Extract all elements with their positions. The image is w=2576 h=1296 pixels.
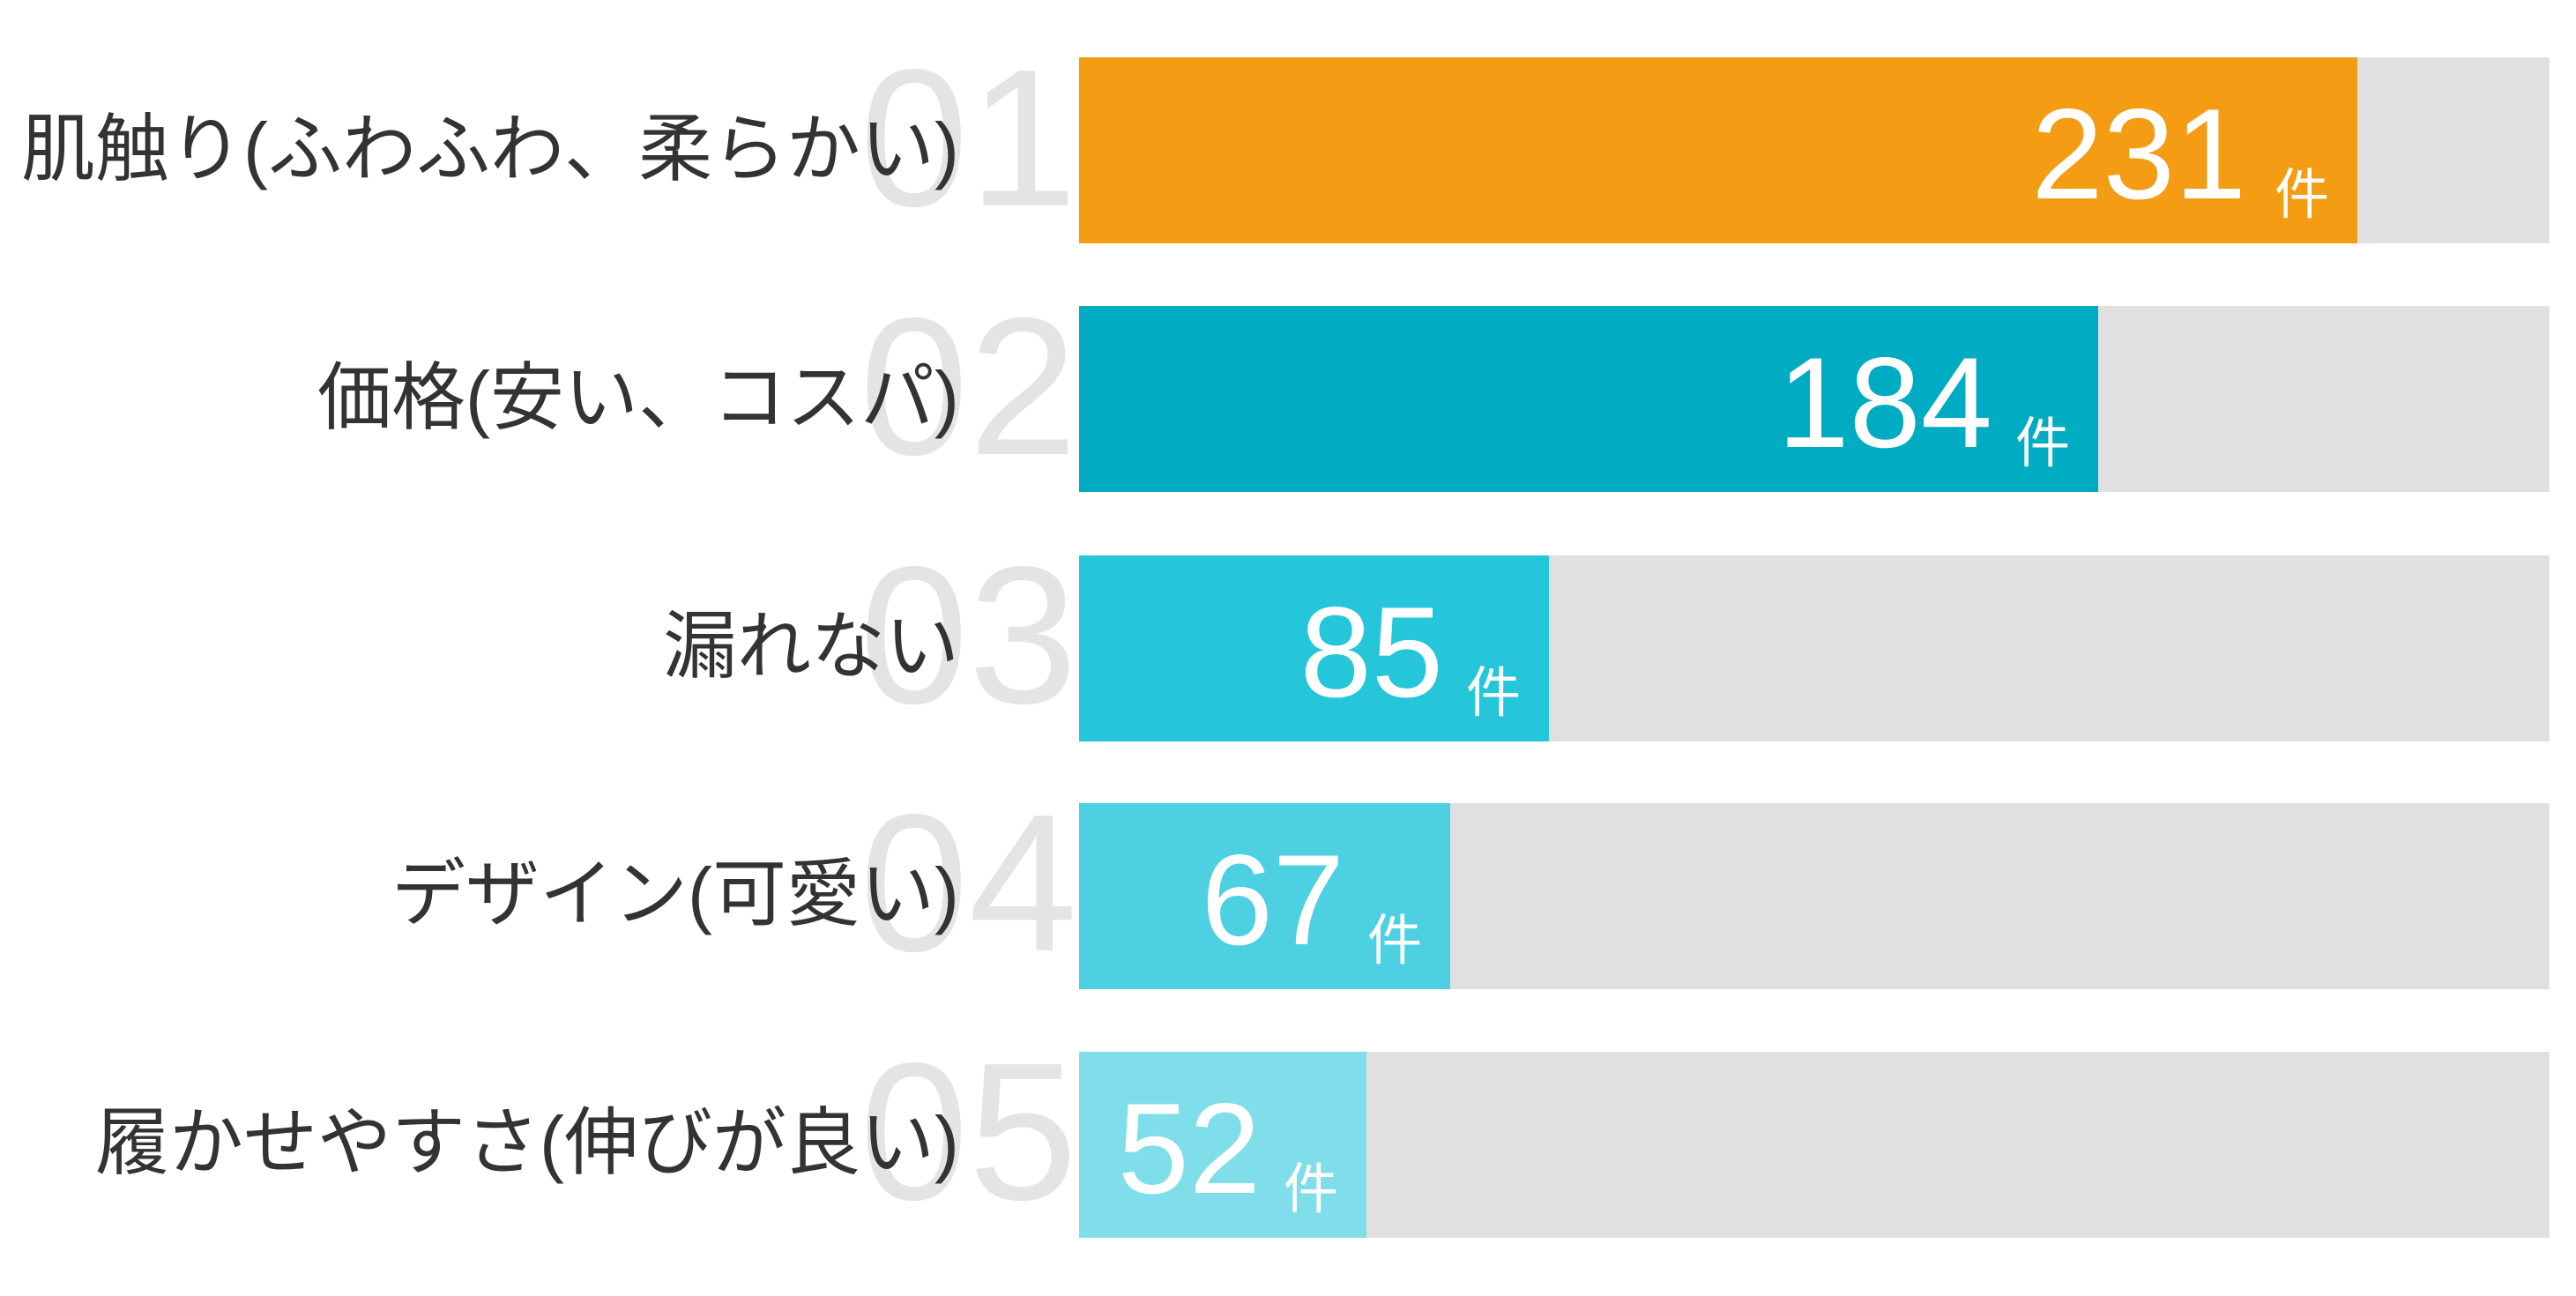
row 5: 履かせやすさ(伸びが良い): [95, 1101, 959, 1184]
row 5: [95, 1023, 2550, 1241]
row 3: 漏れない: [663, 605, 959, 688]
row 4: 67: [1202, 828, 1344, 972]
row 2: 02: [860, 278, 1077, 496]
row 1: 肌触り(ふわふわ、柔らかい): [21, 108, 959, 190]
row 4: デザイン(可愛い): [391, 853, 959, 935]
row 4: 04: [860, 774, 1077, 993]
row 2: 件: [2015, 413, 2070, 474]
row 3: 85: [1300, 580, 1443, 724]
row 4: [391, 774, 2550, 993]
row 3: 03: [860, 526, 1077, 745]
row 2: 価格(安い、コスパ): [317, 356, 959, 439]
row 3: [663, 526, 2550, 745]
row 3: 件: [1466, 663, 1521, 724]
row 5: 件: [1284, 1159, 1338, 1220]
row 1: 231: [2031, 82, 2246, 226]
row 2: 184: [1777, 331, 1992, 474]
row 2: [317, 278, 2550, 496]
row 4: 件: [1367, 911, 1422, 972]
row 1: [21, 29, 2550, 248]
row 1: 件: [2274, 165, 2329, 226]
row 5: 52: [1118, 1076, 1261, 1220]
row 5: 05: [860, 1023, 1077, 1241]
row 1: 01: [860, 29, 1077, 248]
